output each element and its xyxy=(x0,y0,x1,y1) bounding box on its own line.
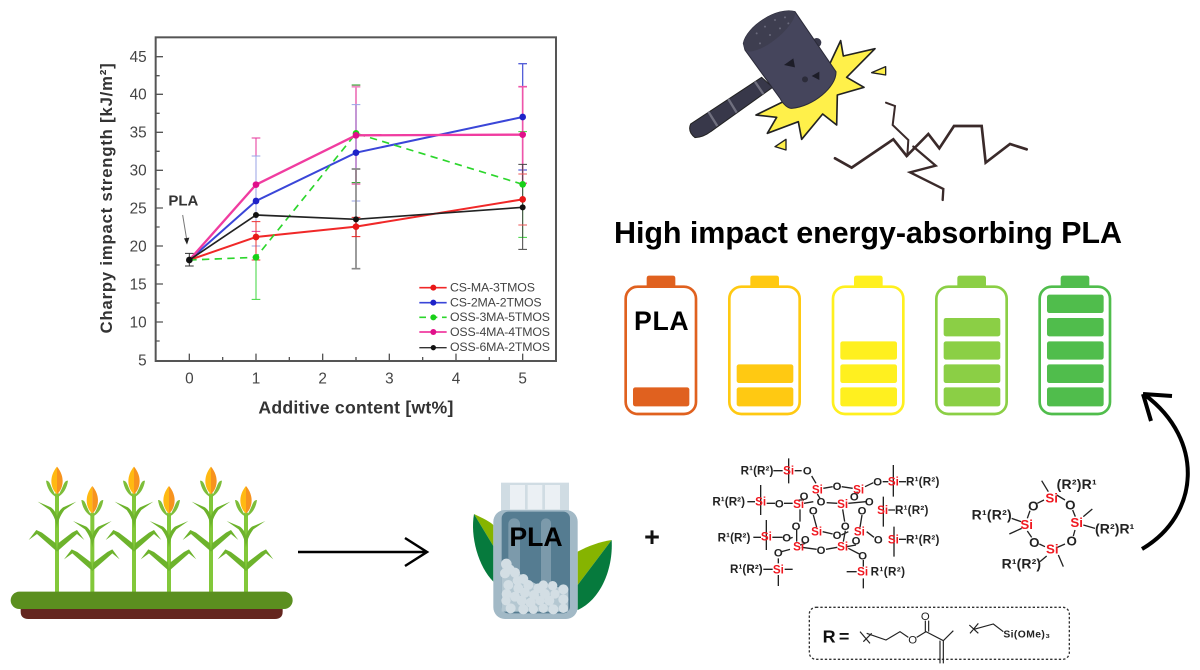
x axis title: Additive content [wt%] xyxy=(258,397,453,417)
oxygen atoms: O xyxy=(833,530,842,542)
silicon atoms: Si xyxy=(755,496,766,509)
PLA annotation with arrow xyxy=(168,193,199,245)
ring oxygen atoms: O xyxy=(1065,498,1076,513)
series: OSS-3MA-5TMOS xyxy=(189,130,526,261)
silicon atoms: Si xyxy=(773,563,784,576)
battery 5 xyxy=(1040,276,1110,414)
battery row xyxy=(626,276,1110,414)
oxygen atoms: O xyxy=(803,466,812,478)
legend: OSS-3MA-5TMOS xyxy=(450,310,550,324)
substituent labels: R¹(R²) xyxy=(906,533,939,546)
oxygen atoms: O xyxy=(792,521,801,533)
oxygen atoms: O xyxy=(874,534,883,546)
ring silicon atoms: Si xyxy=(1045,490,1058,505)
ring substituent labels: (R²)R¹ xyxy=(1057,476,1097,492)
silicon atoms: Si xyxy=(793,541,804,554)
series: CS-MA-3TMOS xyxy=(189,196,526,260)
silicon atoms: Si xyxy=(857,566,868,579)
plus sign: + xyxy=(644,522,660,552)
series: OSS-6MA-2TMOS xyxy=(186,204,526,263)
legend: OSS-4MA-4TMOS xyxy=(450,325,550,339)
substituent labels: R¹(R²) xyxy=(871,566,905,579)
silicon atoms: Si xyxy=(877,504,888,517)
vial label: PLA xyxy=(509,522,563,552)
battery 1: PLA xyxy=(626,276,696,414)
silicon atoms: Si xyxy=(853,483,864,496)
y axis title: Charpy impact strength [kJ/m²] xyxy=(97,63,116,333)
ring silicon atoms: Si xyxy=(1020,517,1033,532)
legend: CS-2MA-2TMOS xyxy=(450,295,542,309)
hammer head xyxy=(743,11,836,108)
y axis tick labels: 35 xyxy=(130,125,147,142)
PLA annotation with arrow: PLA xyxy=(168,193,199,210)
x axis tick labels: 5 xyxy=(518,370,527,387)
ring silicon atoms: Si xyxy=(1070,515,1083,530)
impact star xyxy=(756,41,875,139)
carbonyl and ester oxygens xyxy=(908,611,930,647)
silicon atoms: Si xyxy=(837,541,848,554)
oxygen atoms: O xyxy=(775,498,784,510)
oxygen atoms: O xyxy=(782,532,791,544)
curved arrow to batteries xyxy=(1142,394,1188,549)
oxygen atoms: O xyxy=(841,521,850,533)
ring silicon atoms: Si xyxy=(1046,542,1059,557)
ring oxygen atoms: O xyxy=(1066,533,1077,548)
arrow: corn to PLA xyxy=(298,538,427,566)
oxygen atoms: O xyxy=(801,534,810,546)
x axis tick labels: 4 xyxy=(452,370,461,387)
hammer surface marks xyxy=(756,16,819,82)
y axis tick labels: 25 xyxy=(130,200,147,217)
R group definition box xyxy=(809,607,1069,663)
carbonyl and ester oxygens: O xyxy=(921,611,930,623)
OSS cage structure xyxy=(712,458,939,588)
line chart: Charpy impact strength xyxy=(97,37,556,417)
x axis tick labels xyxy=(185,370,527,387)
silicon atoms xyxy=(755,465,899,579)
oxygen atoms: O xyxy=(865,497,874,509)
y axis tick labels xyxy=(130,49,147,369)
oxygen atoms: O xyxy=(858,550,867,562)
hammer handle xyxy=(690,77,773,138)
ring silicon atoms xyxy=(1020,490,1083,557)
corn field xyxy=(11,467,293,619)
y axis tick labels: 20 xyxy=(130,238,147,255)
oxygen atoms: O xyxy=(833,481,842,493)
series: OSS-4MA-4TMOS xyxy=(189,131,526,260)
y axis tick labels: 10 xyxy=(130,314,147,331)
series: CS-2MA-2TMOS xyxy=(189,114,526,260)
carbonyl and ester oxygens: O xyxy=(908,635,917,647)
oxygen atoms: O xyxy=(873,477,882,489)
crack lines xyxy=(835,103,1027,200)
substituent labels: R¹(R²) xyxy=(895,504,928,517)
silane group label: Si(OMe)₃ xyxy=(1003,630,1050,641)
oxygen atoms xyxy=(774,466,883,562)
error bars xyxy=(185,64,527,299)
ring substituent labels xyxy=(972,476,1135,571)
ring oxygen atoms xyxy=(1028,498,1077,550)
substituent labels: R¹(R²) xyxy=(906,476,939,489)
battery 1: PLA: PLA xyxy=(634,306,689,336)
cyclosiloxane ring structure xyxy=(972,476,1135,571)
PLA vial with leaves xyxy=(473,483,612,619)
hammer striking with crack xyxy=(690,11,1027,200)
y axis tick labels: 5 xyxy=(138,352,147,369)
ring oxygen atoms: O xyxy=(1029,535,1040,550)
R group definition box: R = xyxy=(823,627,849,647)
ring substituent labels: R¹(R²) xyxy=(972,507,1012,523)
oxygen atoms: O xyxy=(852,536,861,548)
oxygen atoms: O xyxy=(809,506,818,518)
y axis tick labels: 45 xyxy=(130,49,147,66)
battery 4 xyxy=(936,276,1007,414)
ring substituent labels: R¹(R²) xyxy=(1002,555,1041,571)
x axis tick labels: 0 xyxy=(185,370,194,387)
silicon atoms: Si xyxy=(888,533,899,546)
oxygen atoms: O xyxy=(817,545,826,557)
silicon atoms: Si xyxy=(793,498,804,511)
battery 2 xyxy=(729,276,800,414)
silicon atoms: Si xyxy=(761,531,772,544)
pellet bed xyxy=(502,563,568,612)
ring oxygen atoms: O xyxy=(1028,499,1039,514)
silicon atoms: Si xyxy=(837,498,848,511)
y axis tick labels: 40 xyxy=(130,87,147,104)
oxygen atoms: O xyxy=(800,491,809,503)
oxygen atoms: O xyxy=(850,492,859,504)
substituent labels: R¹(R²) xyxy=(730,563,763,576)
legend: OSS-6MA-2TMOS xyxy=(450,340,550,354)
debris triangles xyxy=(775,67,886,150)
silicon atoms: Si xyxy=(783,465,794,478)
title: High impact energy-absorbing PLA xyxy=(614,216,1122,250)
hammer striking face xyxy=(743,11,795,52)
oxygen atoms: O xyxy=(858,506,867,518)
y axis tick labels: 15 xyxy=(130,276,147,293)
oxygen atoms: O xyxy=(774,547,783,559)
hammer bolt xyxy=(812,38,821,47)
battery 3 xyxy=(833,276,903,414)
x axis tick labels: 2 xyxy=(318,370,327,387)
handle stripes xyxy=(708,82,763,126)
substituent labels: R¹(R²) xyxy=(718,531,750,544)
legend xyxy=(419,281,550,354)
silicon atoms: Si xyxy=(888,476,899,489)
silicon atoms: Si xyxy=(812,483,823,496)
silicon atoms: Si xyxy=(811,526,822,539)
x axis tick labels: 1 xyxy=(252,370,260,387)
pellets xyxy=(500,559,568,614)
substituent labels: R¹(R²) xyxy=(741,465,773,478)
substituent labels xyxy=(712,465,939,579)
ring substituent labels: (R²)R¹ xyxy=(1095,520,1135,536)
silicon atoms: Si xyxy=(854,526,865,539)
legend: CS-MA-3TMOS xyxy=(450,281,535,295)
x axis tick labels: 3 xyxy=(385,370,394,387)
y axis tick labels: 30 xyxy=(130,163,147,180)
substituent labels: R¹(R²) xyxy=(712,496,745,509)
oxygen atoms: O xyxy=(817,497,826,509)
